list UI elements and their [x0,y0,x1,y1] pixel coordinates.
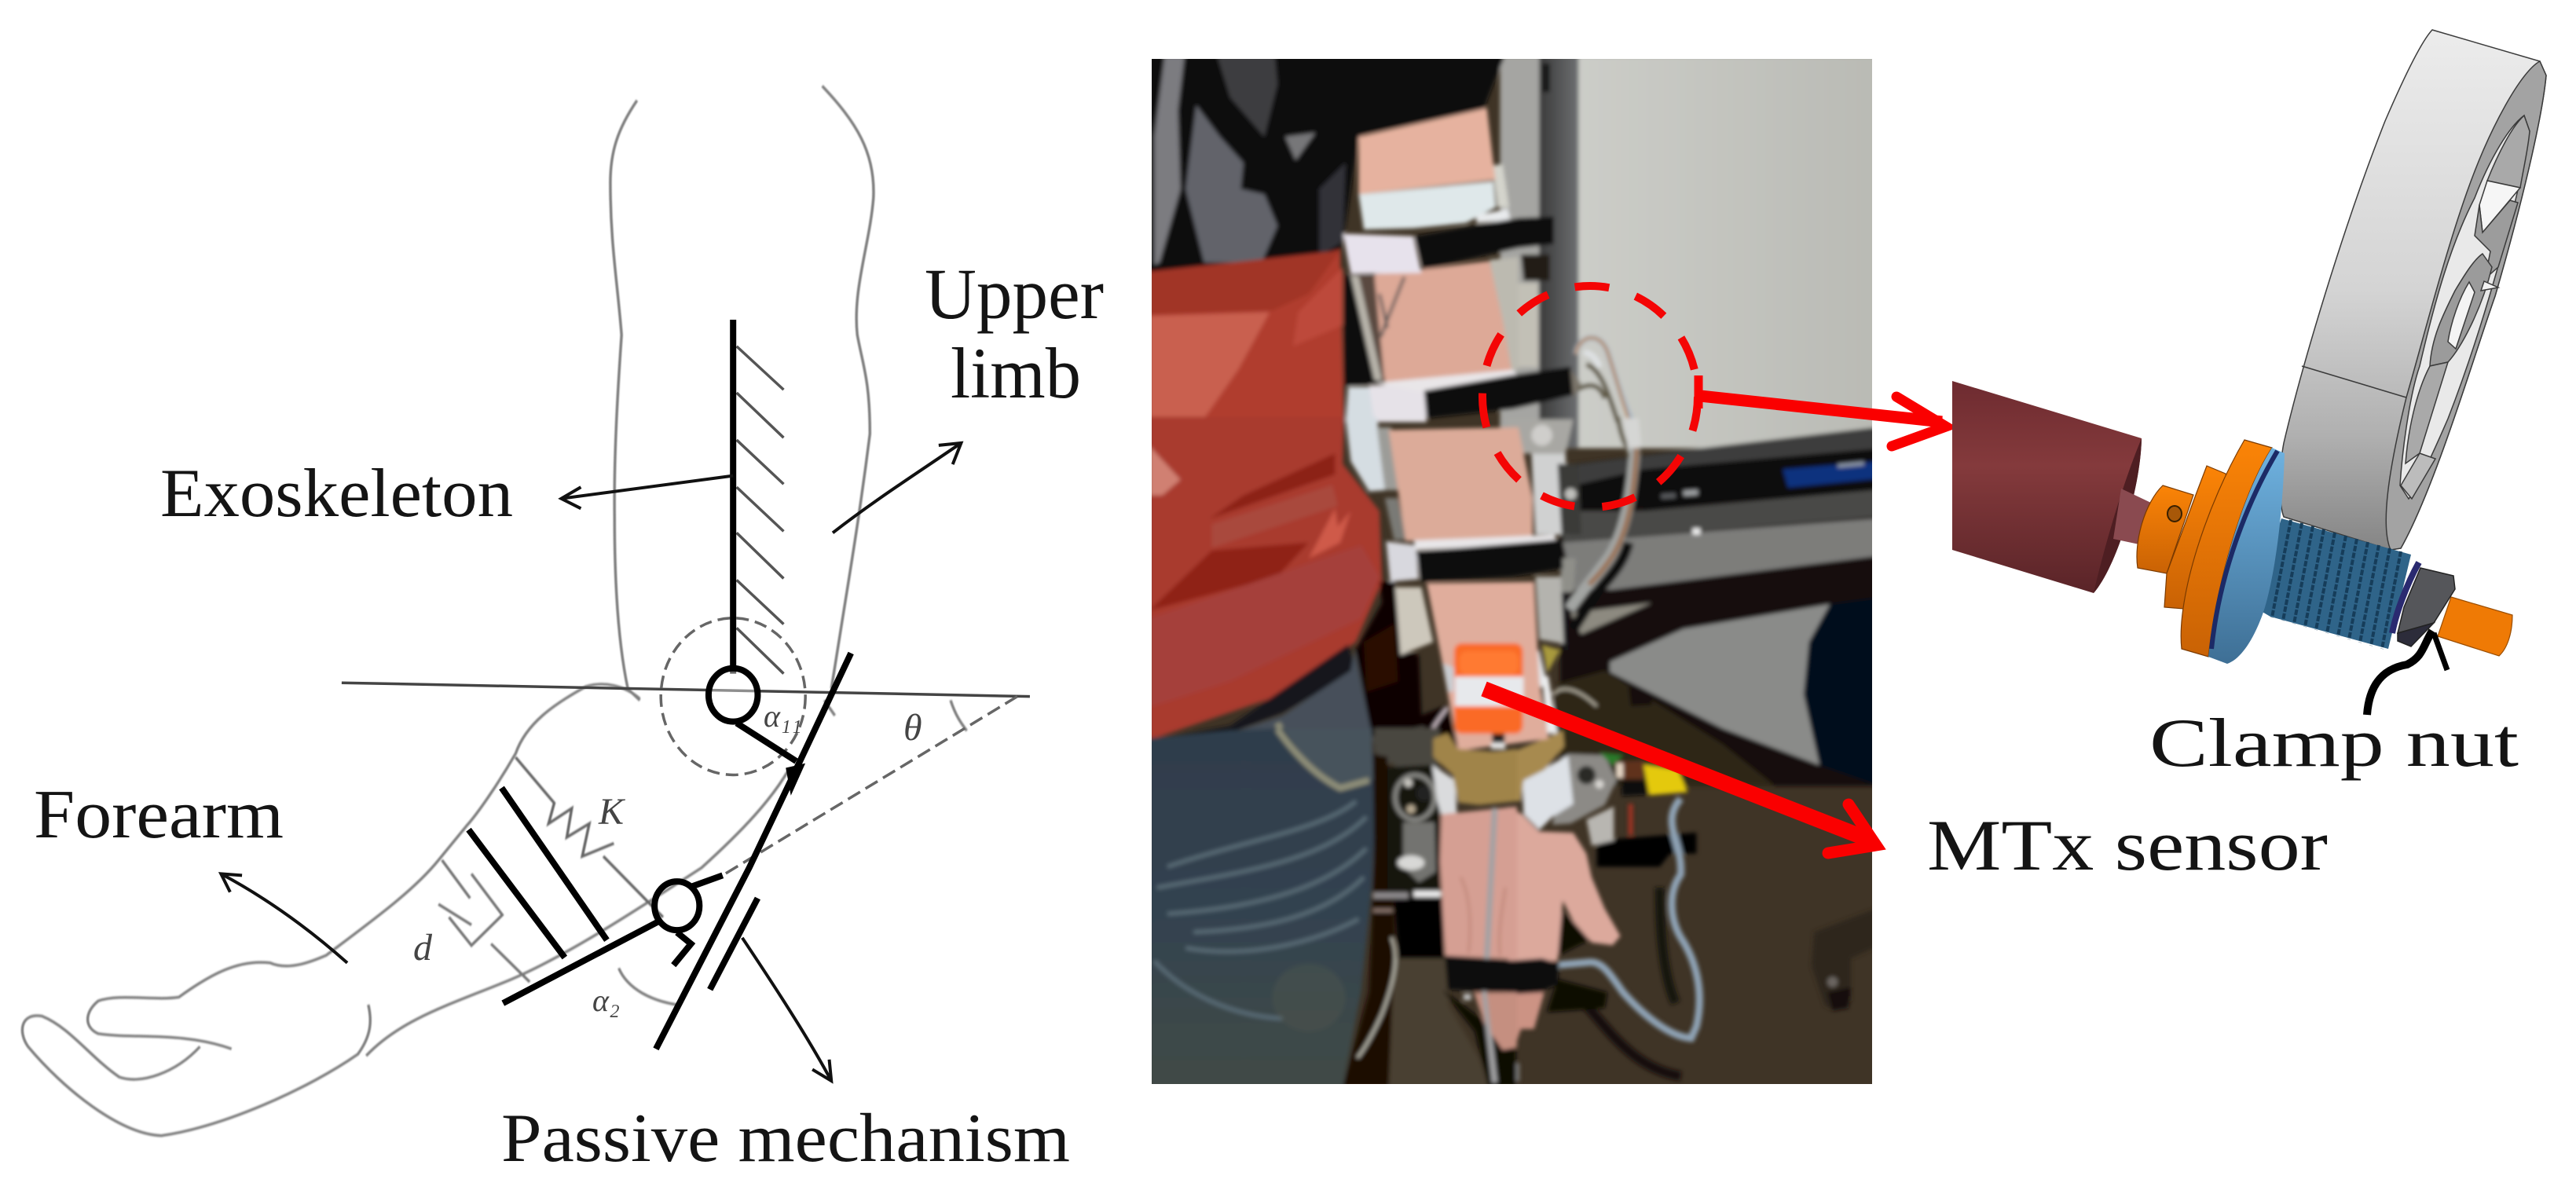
panel: photo of exoskeleton worn on the arm [1149,56,1880,1086]
photo: floor, cable and thumb [1508,731,1880,1082]
label: Passive mechanism: Passive mechanism [501,1101,1070,1177]
exoskeleton links and joints [469,320,851,1049]
photo: black jacket, upper arm and straps [1149,56,1581,422]
maroon cylinder [1952,381,2151,593]
orange collar [2137,440,2272,657]
panel: arm schematic [22,86,1104,1177]
label: Upper limb [925,254,1104,413]
label: Clamp nut: Clamp nut [2149,705,2519,782]
red dashed circle around elbow joint [1482,286,1698,507]
red arrow: sensor to MTx sensor label [1484,689,1876,853]
horizontal and dashed reference lines [342,346,1030,875]
label: angle and constants: d [413,927,433,969]
label: MTx sensor: MTx sensor [1927,805,2328,885]
clamp nut [2398,568,2455,646]
photo: wall and post [1500,56,1880,449]
black clamp nut pointer [2367,631,2447,715]
photo: red shirt, belt and forearm [1149,417,1563,783]
red arrow: elbow joint to CAD model [1698,375,1946,446]
arm outline sketch [22,86,967,1136]
gray wheel [2280,30,2546,550]
label: angle and constants: α₂ [592,983,620,1018]
photo: shelf and chair backdrop [1508,417,1880,786]
photo: jeans and hand [1149,728,1517,1086]
label: angle and constants: θ [903,707,922,749]
orange shaft [2438,597,2512,656]
label: Exoskeleton: Exoskeleton [160,456,513,532]
label: Upper limb: limb [951,333,1081,413]
panel: CAD model of passive joint [1952,30,2546,715]
label: angle and constants: α₁₁ [764,698,802,734]
label: angle and constants [413,698,922,1018]
label: Forearm: Forearm [34,777,284,853]
label: angle and constants: K [598,791,626,833]
thin leader arrows [221,443,961,1081]
blue threaded body [2208,448,2419,664]
label: Upper limb: Upper [925,254,1104,334]
